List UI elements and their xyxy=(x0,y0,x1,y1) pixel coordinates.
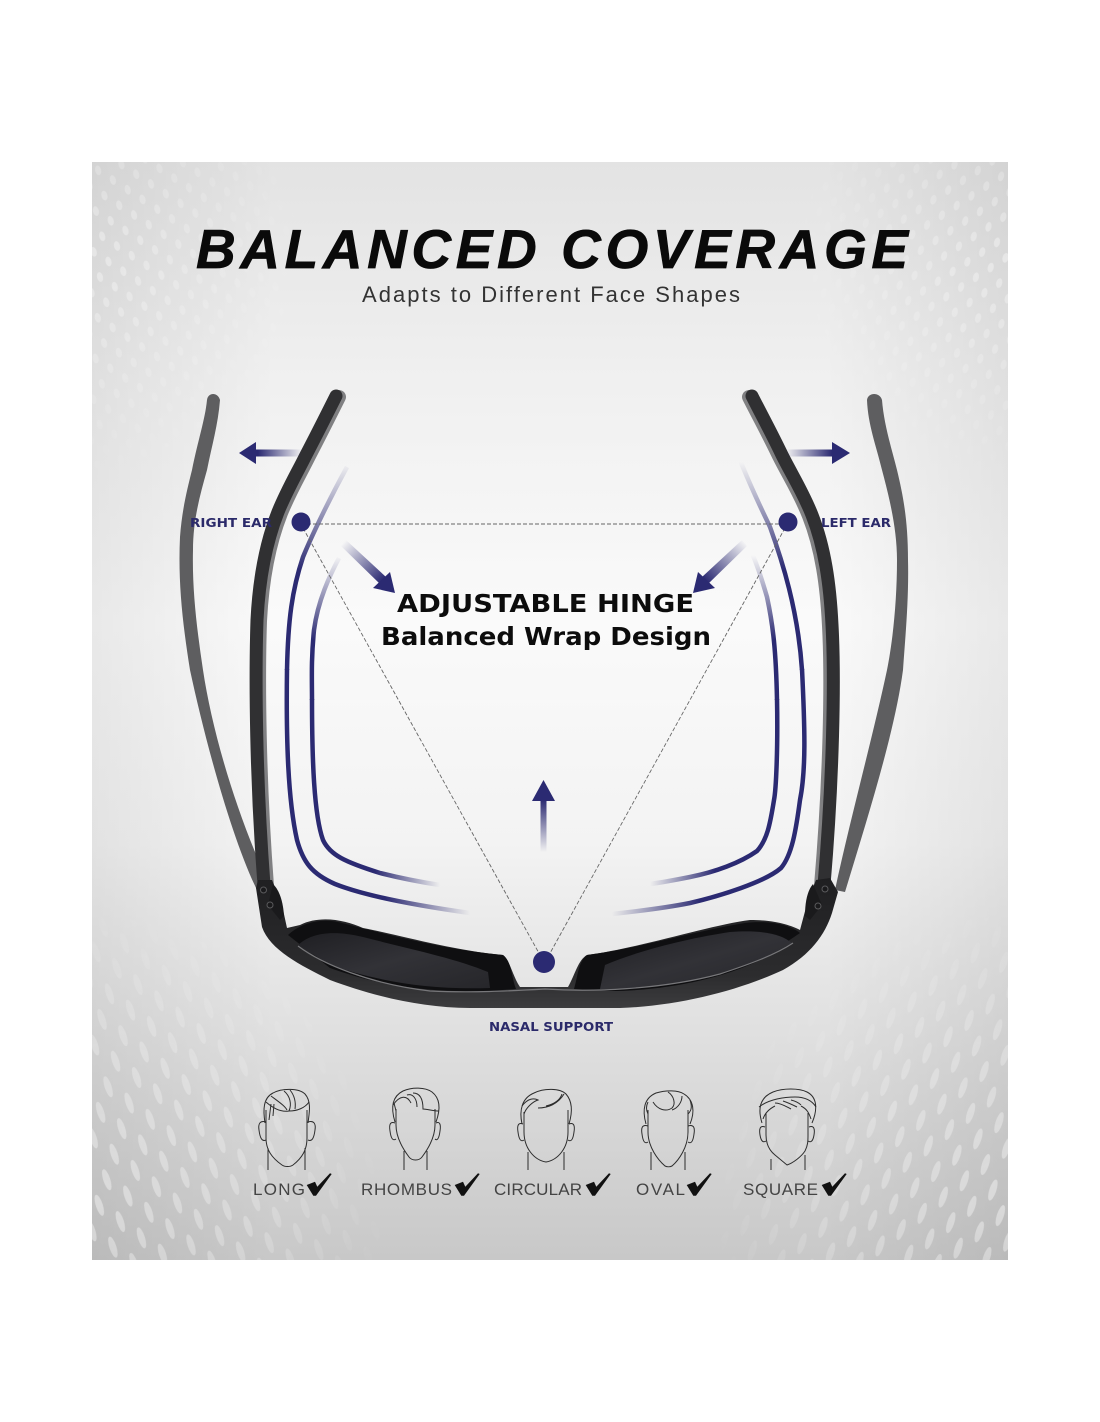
left rim xyxy=(288,921,516,991)
arrow: temple opens left xyxy=(239,442,303,464)
dashed triangle xyxy=(301,524,788,955)
icon: check oval xyxy=(687,1173,712,1196)
left temple, closed position xyxy=(256,396,339,886)
right temple, open position xyxy=(835,394,908,892)
left temple, open position xyxy=(179,394,268,892)
arrow: hinge inward right xyxy=(693,540,747,593)
right lens xyxy=(600,931,792,989)
icon: check circular xyxy=(586,1173,611,1196)
icon: square face xyxy=(759,1089,816,1170)
marker: left ear xyxy=(778,512,798,532)
infographic canvas xyxy=(92,162,1008,1260)
label: nasal support: NASAL SUPPORT xyxy=(489,1019,613,1034)
arrow: temple opens right xyxy=(786,442,850,464)
label: rhombus: RHOMBUS xyxy=(361,1180,452,1199)
left lens xyxy=(298,933,490,988)
callout subheading: Balanced Wrap Design xyxy=(381,622,711,651)
arrow: upward xyxy=(532,780,555,852)
frame body xyxy=(256,878,838,1008)
label: left ear: LEFT EAR xyxy=(821,515,891,530)
marker: nasal support xyxy=(533,951,555,973)
label: oval: OVAL xyxy=(636,1180,685,1199)
subtitle: Adapts to Different Face Shapes xyxy=(362,282,740,307)
icon: check rhombus xyxy=(455,1173,480,1196)
label: circular: CIRCULAR xyxy=(494,1180,582,1199)
label: long: LONG xyxy=(253,1180,305,1199)
frame highlight xyxy=(298,943,793,992)
callout heading: ADJUSTABLE HINGE xyxy=(397,589,694,618)
right temple, closed position xyxy=(749,396,833,886)
label: square: SQUARE xyxy=(743,1180,818,1199)
navy wrap curves, right xyxy=(612,460,804,914)
icon: circular face xyxy=(518,1089,574,1170)
navy wrap curves, left xyxy=(287,467,470,913)
icon: rhombus face xyxy=(390,1088,440,1170)
marker: right ear xyxy=(292,512,310,532)
right hinge xyxy=(805,884,828,920)
left hinge xyxy=(260,884,284,920)
label: right ear: RIGHT EAR xyxy=(190,515,272,530)
title: BALANCED COVERAGE xyxy=(196,218,910,280)
sunglasses frame xyxy=(256,878,838,1008)
icon: check square xyxy=(822,1173,847,1196)
right rim xyxy=(574,922,800,991)
panel: background xyxy=(92,162,1008,1260)
icon: oval face xyxy=(642,1091,694,1170)
icon: long face xyxy=(259,1089,315,1170)
arrow: hinge inward left xyxy=(341,540,395,593)
icon: check long xyxy=(307,1173,332,1196)
